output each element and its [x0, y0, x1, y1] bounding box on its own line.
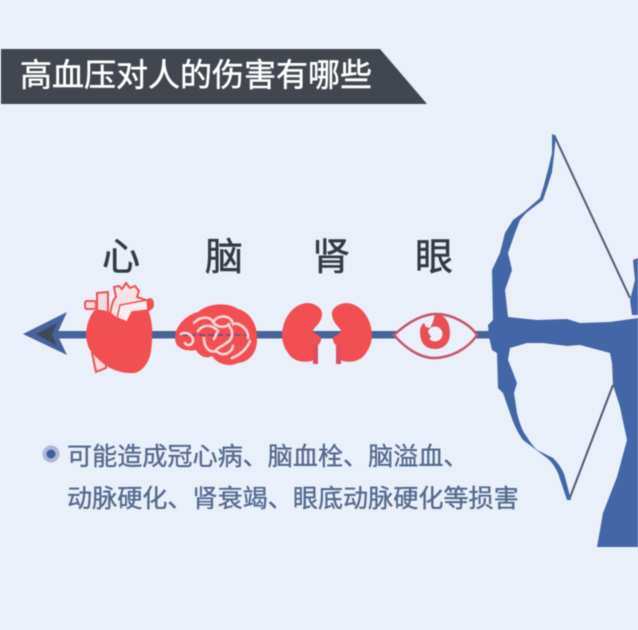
description text: 动脉硬化、肾衰竭、眼底动脉硬化等损害	[67, 485, 519, 513]
organ labels: 脑	[205, 237, 243, 279]
icon: heart	[85, 283, 154, 373]
archer and bow	[488, 134, 638, 547]
title banner: 高血压对人的伤害有哪些	[20, 57, 372, 93]
organ labels	[102, 237, 453, 279]
arrow	[23, 312, 491, 355]
icon: eye	[394, 314, 477, 358]
icon: brain	[175, 304, 257, 365]
description text	[67, 443, 519, 513]
title banner	[1, 49, 427, 104]
organ labels: 心	[102, 237, 140, 279]
bullet point	[42, 446, 60, 462]
icon: kidneys	[282, 303, 372, 364]
organ labels: 眼	[415, 237, 453, 279]
organ labels: 肾	[312, 237, 350, 279]
description text: 可能造成冠心病、脑血栓、脑溢血、	[67, 443, 469, 471]
bow string	[554, 135, 630, 500]
